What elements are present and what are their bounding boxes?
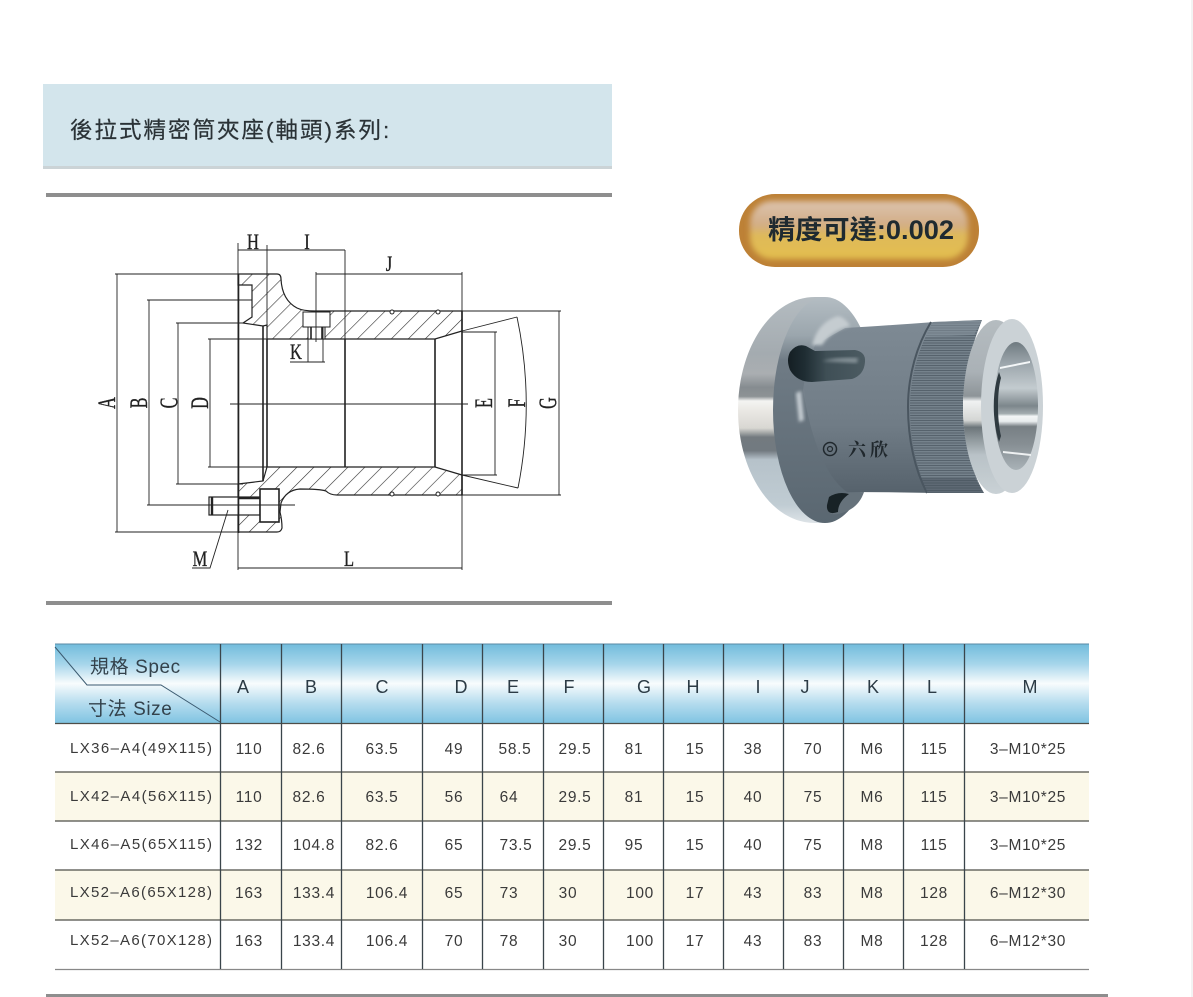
drawing dimension letters: D [185, 397, 214, 409]
row LX36: LX36–A4(49X115) [70, 740, 212, 757]
row LX42: 64 [500, 789, 518, 806]
table header: M [1022, 677, 1038, 697]
row LX46: 132 [235, 837, 263, 854]
row LX52 65: 106.4 [366, 885, 408, 902]
row LX46: 65 [445, 837, 463, 854]
table header: E [507, 677, 519, 697]
row LX52 65: 83 [804, 885, 822, 902]
table header: H [686, 677, 700, 697]
row LX36: 29.5 [559, 741, 591, 758]
row LX52 70: 17 [686, 933, 704, 950]
body groove [908, 322, 931, 493]
row LX52 70: 78 [500, 933, 518, 950]
knurled band [910, 320, 984, 493]
row LX36 [70, 740, 1066, 758]
bore lines [238, 274, 462, 533]
drawing dimension letters: B [124, 398, 153, 408]
row LX52 70: 43 [744, 933, 762, 950]
row LX52 65: LX52–A6(65X128) [70, 884, 212, 901]
row LX36: 58.5 [499, 741, 531, 758]
row LX36: 3–M10*25 [990, 741, 1066, 758]
row LX36: 49 [445, 741, 463, 758]
row LX42: 115 [921, 789, 947, 806]
specification table [55, 644, 1089, 970]
drawing dimension letters: J [386, 253, 393, 277]
row LX52 70: 30 [559, 933, 577, 950]
row LX36: 82.6 [293, 741, 325, 758]
table header: D [454, 677, 468, 697]
row LX52 65: 163 [235, 885, 263, 902]
drawing dimension letters [92, 231, 562, 572]
table header: F [564, 677, 574, 697]
row LX52 65: M8 [861, 885, 883, 902]
maker mark: 六欣 [848, 436, 888, 462]
fillet highlight [812, 316, 850, 345]
table header: A [237, 677, 249, 697]
row LX36: 81 [625, 741, 643, 758]
title band [43, 84, 612, 169]
row LX52 65: 100 [626, 885, 654, 902]
row LX52 70: LX52–A6(70X128) [70, 932, 212, 949]
bore [994, 342, 1038, 470]
lower section of holder [238, 467, 462, 532]
row LX52 65: 133.4 [293, 885, 335, 902]
table header: I [755, 677, 761, 697]
drawing dimension letters: G [533, 397, 562, 409]
row LX46: 115 [921, 837, 947, 854]
drawing dimension letters: L [344, 548, 354, 572]
table header: L [927, 677, 937, 697]
row LX52 70: 163 [235, 933, 263, 950]
row LX36: M6 [861, 741, 883, 758]
row LX52 70: 83 [804, 933, 822, 950]
row LX52 70: 106.4 [366, 933, 408, 950]
row LX42: 82.6 [293, 789, 325, 806]
row LX46: 82.6 [366, 837, 398, 854]
body [803, 322, 935, 493]
drawing dimension letters: I [304, 231, 310, 255]
row LX36: 63.5 [366, 741, 398, 758]
row LX46: 73.5 [500, 837, 532, 854]
row LX52 65 [70, 884, 1066, 902]
flange rim [738, 297, 825, 523]
row LX52 70: 128 [920, 933, 948, 950]
maker mark [824, 436, 888, 462]
row LX52 70 [70, 932, 1066, 950]
row LX36: 110 [236, 741, 262, 758]
front ring [981, 319, 1043, 493]
row LX36: 15 [686, 741, 704, 758]
drawing dimension letters: K [290, 341, 302, 365]
row LX42: 3–M10*25 [990, 789, 1066, 806]
row LX46: 40 [744, 837, 762, 854]
row LX46: 95 [625, 837, 643, 854]
row LX42: 15 [686, 789, 704, 806]
table header [55, 644, 1089, 723]
front chamfer [963, 320, 1029, 494]
row LX52 70: 133.4 [293, 933, 335, 950]
row LX42: M6 [861, 789, 883, 806]
table header: J [800, 677, 810, 697]
upper section of holder [238, 274, 462, 339]
drawing dimension letters: H [247, 231, 259, 255]
row LX46: 15 [686, 837, 704, 854]
row LX42: LX42–A4(56X115) [70, 788, 212, 805]
table header: C [376, 677, 388, 697]
row LX42: 56 [445, 789, 463, 806]
row LX36: 38 [744, 741, 762, 758]
drawing dimension letters: A [92, 397, 121, 409]
drawing dimension letters: M [193, 548, 207, 572]
flange face [773, 297, 877, 523]
row LX36: 70 [804, 741, 822, 758]
row LX52 65: 128 [920, 885, 948, 902]
row LX42: 75 [804, 789, 822, 806]
row LX42: 110 [236, 789, 262, 806]
row LX42: 63.5 [366, 789, 398, 806]
table header: K [867, 677, 879, 697]
row LX52 65: 17 [686, 885, 704, 902]
row LX46: M8 [861, 837, 883, 854]
row LX52 65: 65 [445, 885, 463, 902]
row LX46: 3–M10*25 [990, 837, 1066, 854]
table header: 寸法 Size [88, 698, 172, 720]
row LX46: LX46–A5(65X115) [70, 836, 212, 853]
heading: 後拉式精密筒夾座(軸頭)系列: [70, 118, 391, 143]
row LX36: 115 [921, 741, 947, 758]
bolt M [209, 489, 279, 522]
row LX52 70: M8 [861, 933, 883, 950]
row LX52 65: 6–M12*30 [990, 885, 1066, 902]
table header: G [637, 677, 651, 697]
row LX46: 104.8 [293, 837, 335, 854]
bolt counterbore [303, 310, 440, 496]
row LX46: 75 [804, 837, 822, 854]
product photo: collet chuck [738, 297, 1043, 523]
row LX42: 40 [744, 789, 762, 806]
row LX52 65: 30 [559, 885, 577, 902]
slot top [788, 345, 865, 382]
drawing dimension letters: C [154, 398, 183, 408]
row LX42: 81 [625, 789, 643, 806]
row LX42: 29.5 [559, 789, 591, 806]
precision badge [739, 194, 979, 267]
table header: B [305, 677, 317, 697]
slot bottom [827, 492, 864, 514]
drawing dimension letters: F [502, 398, 531, 408]
row LX52 65: 43 [744, 885, 762, 902]
dimension lines [115, 243, 561, 570]
table header: 規格 Spec [90, 656, 181, 678]
row LX46 [70, 836, 1066, 854]
engineering drawing: cross-section with dimensions [115, 243, 561, 570]
precision badge: 精度可達:0.002 [768, 215, 954, 245]
row LX52 65: 73 [500, 885, 518, 902]
row LX42 [70, 788, 1066, 806]
row LX52 70: 100 [626, 933, 654, 950]
row LX52 70: 70 [445, 933, 463, 950]
row LX52 70: 6–M12*30 [990, 933, 1066, 950]
row LX46: 29.5 [559, 837, 591, 854]
drawing dimension letters: E [469, 398, 498, 408]
